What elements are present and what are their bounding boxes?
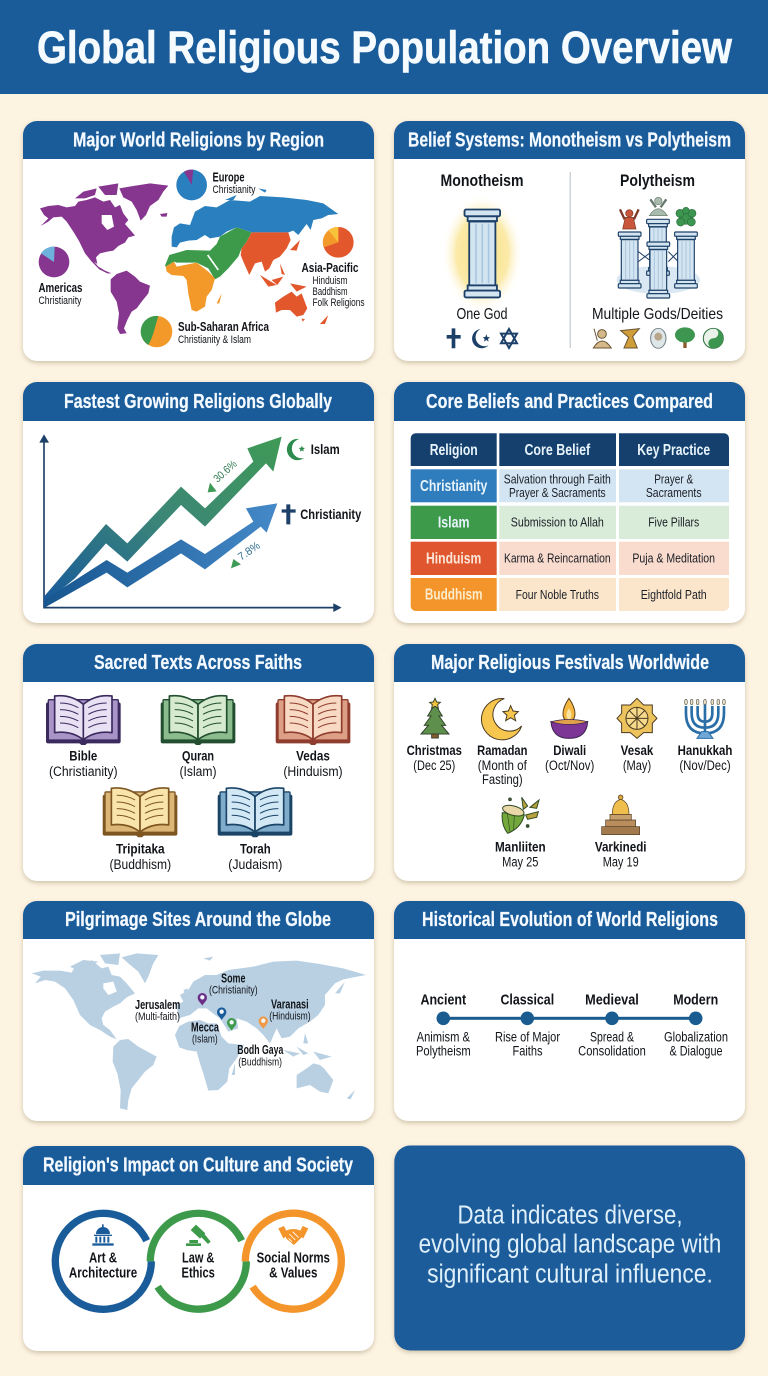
summary text: Data indicates diverse, — [458, 1201, 682, 1229]
icon: crescent and star — [481, 699, 522, 740]
label: art and architecture: Art & — [89, 1250, 117, 1267]
panel: historical evolution — [394, 901, 745, 1121]
label: jerusalem — [135, 998, 180, 1023]
icon: handshake — [278, 1226, 308, 1245]
arrow: islam growth — [44, 437, 282, 603]
value: christianity growth: 7.8% — [236, 540, 263, 563]
icon: vesak wheel — [617, 698, 657, 738]
icon: capitol building — [92, 1224, 114, 1246]
label: ramadan: (Month of — [478, 758, 527, 773]
icon: christmas tree — [421, 698, 449, 738]
label: law and ethics — [182, 1250, 215, 1282]
summary text: significant cultural influence. — [427, 1261, 713, 1289]
label: rome site — [209, 971, 258, 996]
label: law and ethics: Ethics — [182, 1265, 215, 1282]
icon: cross — [447, 328, 461, 348]
panel: belief systems — [394, 121, 745, 361]
label: manliiten: May 25 — [502, 855, 538, 870]
icon: star of david — [501, 329, 517, 348]
table: buddhism row — [411, 578, 729, 611]
icon: tree — [675, 327, 695, 348]
table: header row: Religion — [430, 442, 478, 459]
label: varanasi: (Hinduism) — [269, 1010, 311, 1022]
subheading: polytheism: Polytheism — [620, 171, 695, 190]
value: islam growth: 30.6% — [211, 458, 240, 485]
book: tripitaka — [103, 788, 177, 872]
label: hanukkah: (Nov/Dec) — [679, 758, 731, 773]
era: classical — [495, 991, 560, 1058]
table: islam row — [411, 506, 729, 539]
label: social norms and values: Social Norms — [257, 1250, 330, 1267]
label: asia-pacific: Folk Religions — [312, 297, 365, 309]
label: americas — [38, 281, 83, 307]
book: quran — [161, 696, 235, 779]
label: varkinedi: Varkinedi — [595, 839, 647, 855]
caption: one god: One God — [456, 306, 508, 323]
label: art and architecture — [69, 1250, 137, 1282]
icon: cross — [282, 504, 296, 524]
label: vesak — [621, 742, 654, 773]
table: hinduism row: Puja & Meditation — [632, 551, 715, 566]
book: bible — [46, 696, 121, 779]
icon: crescent — [472, 329, 490, 348]
label: hanukkah — [678, 742, 732, 773]
pin: mecca — [227, 1018, 236, 1031]
era: ancient: Animism & — [417, 1030, 470, 1045]
heading: fastest growing: Fastest Growing Religions Globally — [64, 390, 332, 413]
table: christianity row: Salvation through Faith — [504, 471, 611, 486]
world map with pins — [32, 953, 366, 1110]
era: classical: Faiths — [512, 1043, 543, 1058]
label: jerusalem: Jerusalem — [135, 998, 180, 1012]
icon: menorah — [685, 699, 725, 738]
label: bodh gaya: (Buddhism) — [238, 1056, 282, 1068]
label: mecca: Mecca — [191, 1021, 220, 1035]
icon: face medallion — [651, 328, 666, 348]
label: diwali: (Oct/Nov) — [545, 758, 594, 773]
summary text — [419, 1201, 721, 1289]
panel: core beliefs table — [394, 382, 745, 623]
timeline — [436, 1012, 702, 1025]
book: quran: Quran — [182, 748, 214, 764]
pie: europe — [176, 170, 207, 200]
label: manliiten: Manliiten — [495, 839, 546, 855]
table: buddhism row: Four Noble Truths — [516, 587, 599, 602]
table: hinduism row: Hinduism — [426, 550, 481, 567]
panel: major festivals — [394, 644, 745, 881]
label: rome site: Some — [221, 971, 245, 985]
era: medieval — [578, 991, 646, 1058]
label: hanukkah: Hanukkah — [678, 742, 732, 758]
era: ancient — [416, 991, 471, 1058]
table: buddhism row: Buddhism — [425, 586, 483, 603]
label: sub-saharan africa — [178, 320, 270, 346]
book: vedas: (Hinduism) — [283, 764, 343, 779]
table: header row — [411, 433, 729, 466]
heading: impact: Religion's Impact on Culture and Society — [43, 1154, 353, 1176]
marker: blue triangle — [231, 559, 241, 568]
label: christmas — [407, 742, 462, 773]
label: law and ethics: Law & — [182, 1250, 214, 1267]
label: mecca — [191, 1021, 220, 1045]
book: quran: (Islam) — [180, 764, 216, 779]
icon: gavel — [186, 1225, 211, 1246]
label: ramadan — [477, 742, 527, 787]
icon: seated deity — [593, 329, 611, 348]
label: asia-pacific — [302, 261, 365, 309]
label: christmas: (Dec 25) — [413, 758, 455, 773]
summary text: evolving global landscape with — [419, 1231, 721, 1259]
label: vesak: Vesak — [621, 742, 654, 758]
label: sub-saharan africa: Christianity & Islam — [178, 334, 251, 346]
era: ancient: Ancient — [420, 991, 466, 1008]
table: christianity row: Prayer & — [654, 471, 694, 486]
caption: multiple gods: Multiple Gods/Deities — [592, 306, 723, 323]
label: social norms and values: & Values — [269, 1265, 317, 1282]
table: hinduism row — [411, 542, 729, 575]
label: sub-saharan africa: Sub-Saharan Africa — [178, 320, 270, 334]
panel: sacred texts — [23, 644, 374, 881]
icon: crescent and star — [287, 439, 305, 460]
label: asia-pacific: Baddhism — [312, 286, 348, 298]
book: torah — [218, 788, 292, 872]
label: ramadan: Ramadan — [477, 742, 527, 758]
label: vesak: (May) — [623, 758, 651, 773]
table: christianity row: Prayer & Sacraments — [509, 485, 606, 500]
label: varkinedi — [595, 839, 647, 870]
label: mecca: (Islam) — [192, 1033, 218, 1045]
table: buddhism row: Eightfold Path — [641, 587, 707, 602]
label: asia-pacific: Hinduism — [312, 275, 348, 287]
icon: single pillar with glow — [442, 195, 522, 312]
heading: major world religions: Major World Religions by Region — [73, 128, 324, 152]
pie: americas — [39, 247, 69, 277]
line chart with growth arrows — [39, 434, 342, 612]
label: europe: Europe — [212, 170, 245, 184]
book: vedas — [276, 696, 350, 779]
era: modern: & Dialogue — [670, 1043, 722, 1058]
icon: diya lamp — [551, 698, 588, 738]
panel: impact on culture and society — [23, 1146, 374, 1351]
icon: golden deity — [621, 329, 639, 348]
table: header row: Core Belief — [524, 442, 591, 459]
heading: sacred texts: Sacred Texts Across Faiths — [94, 651, 302, 674]
table: hinduism row: Karma & Reincarnation — [504, 551, 611, 566]
label: varanasi: Varanasi — [271, 997, 309, 1011]
label: manliiten — [495, 839, 546, 870]
label: varkinedi: May 19 — [603, 855, 639, 870]
panel: major world religions by region — [23, 121, 374, 361]
label: bodh gaya — [237, 1043, 284, 1068]
pin: jerusalem — [217, 1007, 226, 1020]
table: islam row: Five Pillars — [648, 515, 699, 530]
book: tripitaka: (Buddhism) — [109, 857, 171, 872]
book: bible: (Christianity) — [49, 764, 118, 779]
pin: varanasi — [259, 1016, 268, 1029]
table: header row: Key Practice — [637, 442, 710, 459]
label: ramadan: Fasting) — [482, 772, 523, 787]
interlinked rings with icons — [55, 1213, 341, 1309]
label: art and architecture: Architecture — [69, 1265, 137, 1282]
book: vedas: Vedas — [296, 748, 330, 764]
icon: stupa temple — [602, 795, 640, 835]
era: medieval: Medieval — [585, 991, 639, 1008]
table: islam row: Submission to Allah — [511, 515, 604, 530]
icon: yin yang — [703, 328, 723, 348]
era: medieval: Consolidation — [578, 1043, 646, 1058]
era: modern: Globalization — [664, 1030, 728, 1045]
label: diwali — [545, 742, 594, 773]
world map coloured by region — [39, 170, 354, 347]
panel: pilgrimage sites — [23, 901, 374, 1121]
arrow: christianity growth — [44, 503, 277, 608]
icon: festive drum — [501, 797, 539, 833]
table: christianity row: Sacraments — [646, 485, 702, 500]
label: europe — [212, 170, 256, 196]
table: christianity row — [411, 469, 729, 502]
era: modern: Modern — [673, 991, 718, 1008]
label: bodh gaya: Bodh Gaya — [237, 1043, 284, 1057]
era: modern — [664, 991, 728, 1058]
label: varanasi — [269, 997, 311, 1022]
table: islam row: Islam — [438, 514, 470, 531]
era: classical: Classical — [500, 991, 554, 1008]
book: torah: Torah — [240, 840, 271, 856]
table: christianity row: Christianity — [420, 478, 488, 495]
book: tripitaka: Tripitaka — [116, 840, 165, 856]
label: social norms and values — [257, 1250, 330, 1282]
era: classical: Rise of Major — [495, 1030, 560, 1045]
icon: group of pillars with deities — [617, 197, 700, 298]
label: europe: Christianity — [212, 184, 256, 196]
label: christianity: Christianity — [300, 507, 362, 522]
title banner — [0, 0, 768, 94]
label: christmas: Christmas — [407, 742, 462, 758]
label: americas: Americas — [38, 281, 83, 295]
label: islam: Islam — [311, 442, 340, 457]
panel: fastest growing religions — [23, 382, 374, 623]
era: medieval: Spread & — [590, 1030, 634, 1045]
marker: green triangle — [208, 483, 217, 492]
label: diwali: Diwali — [553, 742, 586, 758]
book: bible: Bible — [69, 748, 97, 764]
pie: sub-saharan africa — [141, 316, 172, 347]
label: asia-pacific: Asia-Pacific — [302, 261, 359, 275]
heading: pilgrimage: Pilgrimage Sites Around the Globe — [65, 908, 331, 931]
label: americas: Christianity — [38, 295, 82, 307]
pin: rome — [198, 993, 207, 1006]
book: torah: (Judaism) — [228, 857, 282, 872]
pie: asia-pacific — [323, 227, 354, 258]
panel: summary callout — [394, 1146, 745, 1350]
label: rome site: (Christianity) — [209, 984, 258, 996]
era: ancient: Polytheism — [416, 1043, 471, 1058]
label: jerusalem: (Multi-faith) — [135, 1011, 180, 1023]
subheading: monotheism: Monotheism — [440, 171, 524, 190]
